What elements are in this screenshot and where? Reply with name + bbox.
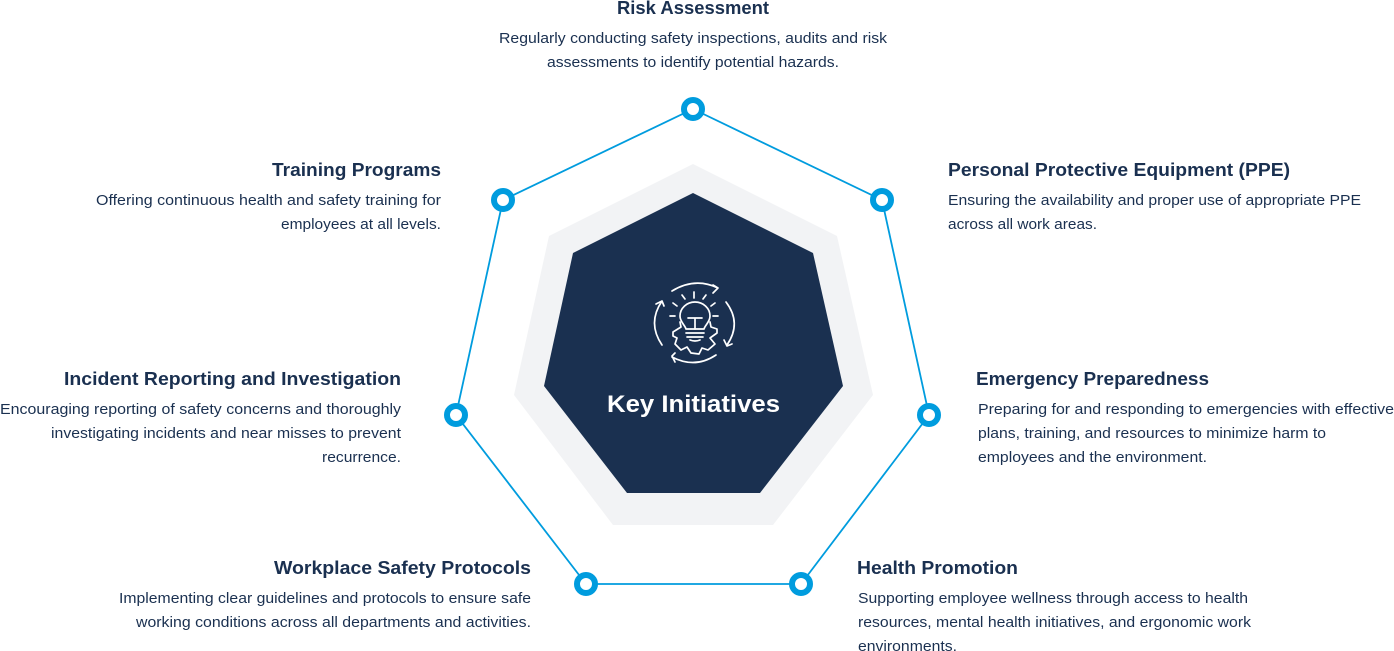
text block: Workplace Safety Protocols: Implementing clear guidelines and protocols to ensure safe <box>119 591 531 607</box>
text block: Risk Assessment: assessments to identify potential hazards. <box>547 55 839 71</box>
text block: Personal Protective Equipment: Ensuring the availability and proper use of appropriate PPE <box>948 193 1361 209</box>
text block: Training Programs: Offering continuous health and safety training for <box>96 193 441 209</box>
text block: Workplace Safety Protocols: Workplace Safety Protocols <box>274 558 531 578</box>
text block: Risk Assessment <box>499 0 888 71</box>
text block: Emergency Preparedness <box>976 369 1394 466</box>
text block: Incident Reporting and Investigation: recurrence. <box>322 450 401 466</box>
text block: Personal Protective Equipment <box>948 160 1361 233</box>
text block: Health Promotion <box>857 558 1252 651</box>
text block: Training Programs: employees at all levels. <box>281 217 441 233</box>
text block: Emergency Preparedness: Preparing for and responding to emergencies with effective <box>978 402 1394 418</box>
text block: Training Programs: Training Programs <box>272 160 441 180</box>
text block: Emergency Preparedness: employees and the environment. <box>978 450 1207 466</box>
node markers <box>447 100 938 593</box>
text block: Risk Assessment: Regularly conducting safety inspections, audits and risk <box>499 31 888 47</box>
text block: Personal Protective Equipment: Personal Protective Equipment (PPE) <box>948 160 1290 180</box>
text block: Incident Reporting and Investigation: Incident Reporting and Investigation <box>64 369 401 389</box>
text block: Workplace Safety Protocols <box>119 558 531 631</box>
text block: Health Promotion: Supporting employee wellness through access to health <box>858 591 1248 607</box>
center title: Key Initiatives <box>607 391 780 418</box>
text block: Incident Reporting and Investigation <box>0 369 402 466</box>
text block: Health Promotion: Health Promotion <box>857 558 1018 578</box>
text block: Emergency Preparedness: Emergency Preparedness <box>976 369 1209 389</box>
icon: lightbulb, gear and cycle arrows <box>654 283 734 363</box>
connecting heptagon outline <box>456 109 929 584</box>
text block: Workplace Safety Protocols: working conditions across all departments and activities. <box>135 615 531 631</box>
text block: Health Promotion: resources, mental health initiatives, and ergonomic work <box>858 615 1252 631</box>
outer light heptagon <box>514 164 873 525</box>
text block: Personal Protective Equipment: across all work areas. <box>948 217 1097 233</box>
text block: Incident Reporting and Investigation: Encouraging reporting of safety concerns and thoroughly <box>0 402 402 418</box>
inner dark heptagon <box>544 193 843 493</box>
text block: Emergency Preparedness: plans, training, and resources to minimize harm to <box>978 426 1326 442</box>
text block: Incident Reporting and Investigation: investigating incidents and near misses to prevent <box>51 426 401 442</box>
text block: Training Programs <box>96 160 441 233</box>
